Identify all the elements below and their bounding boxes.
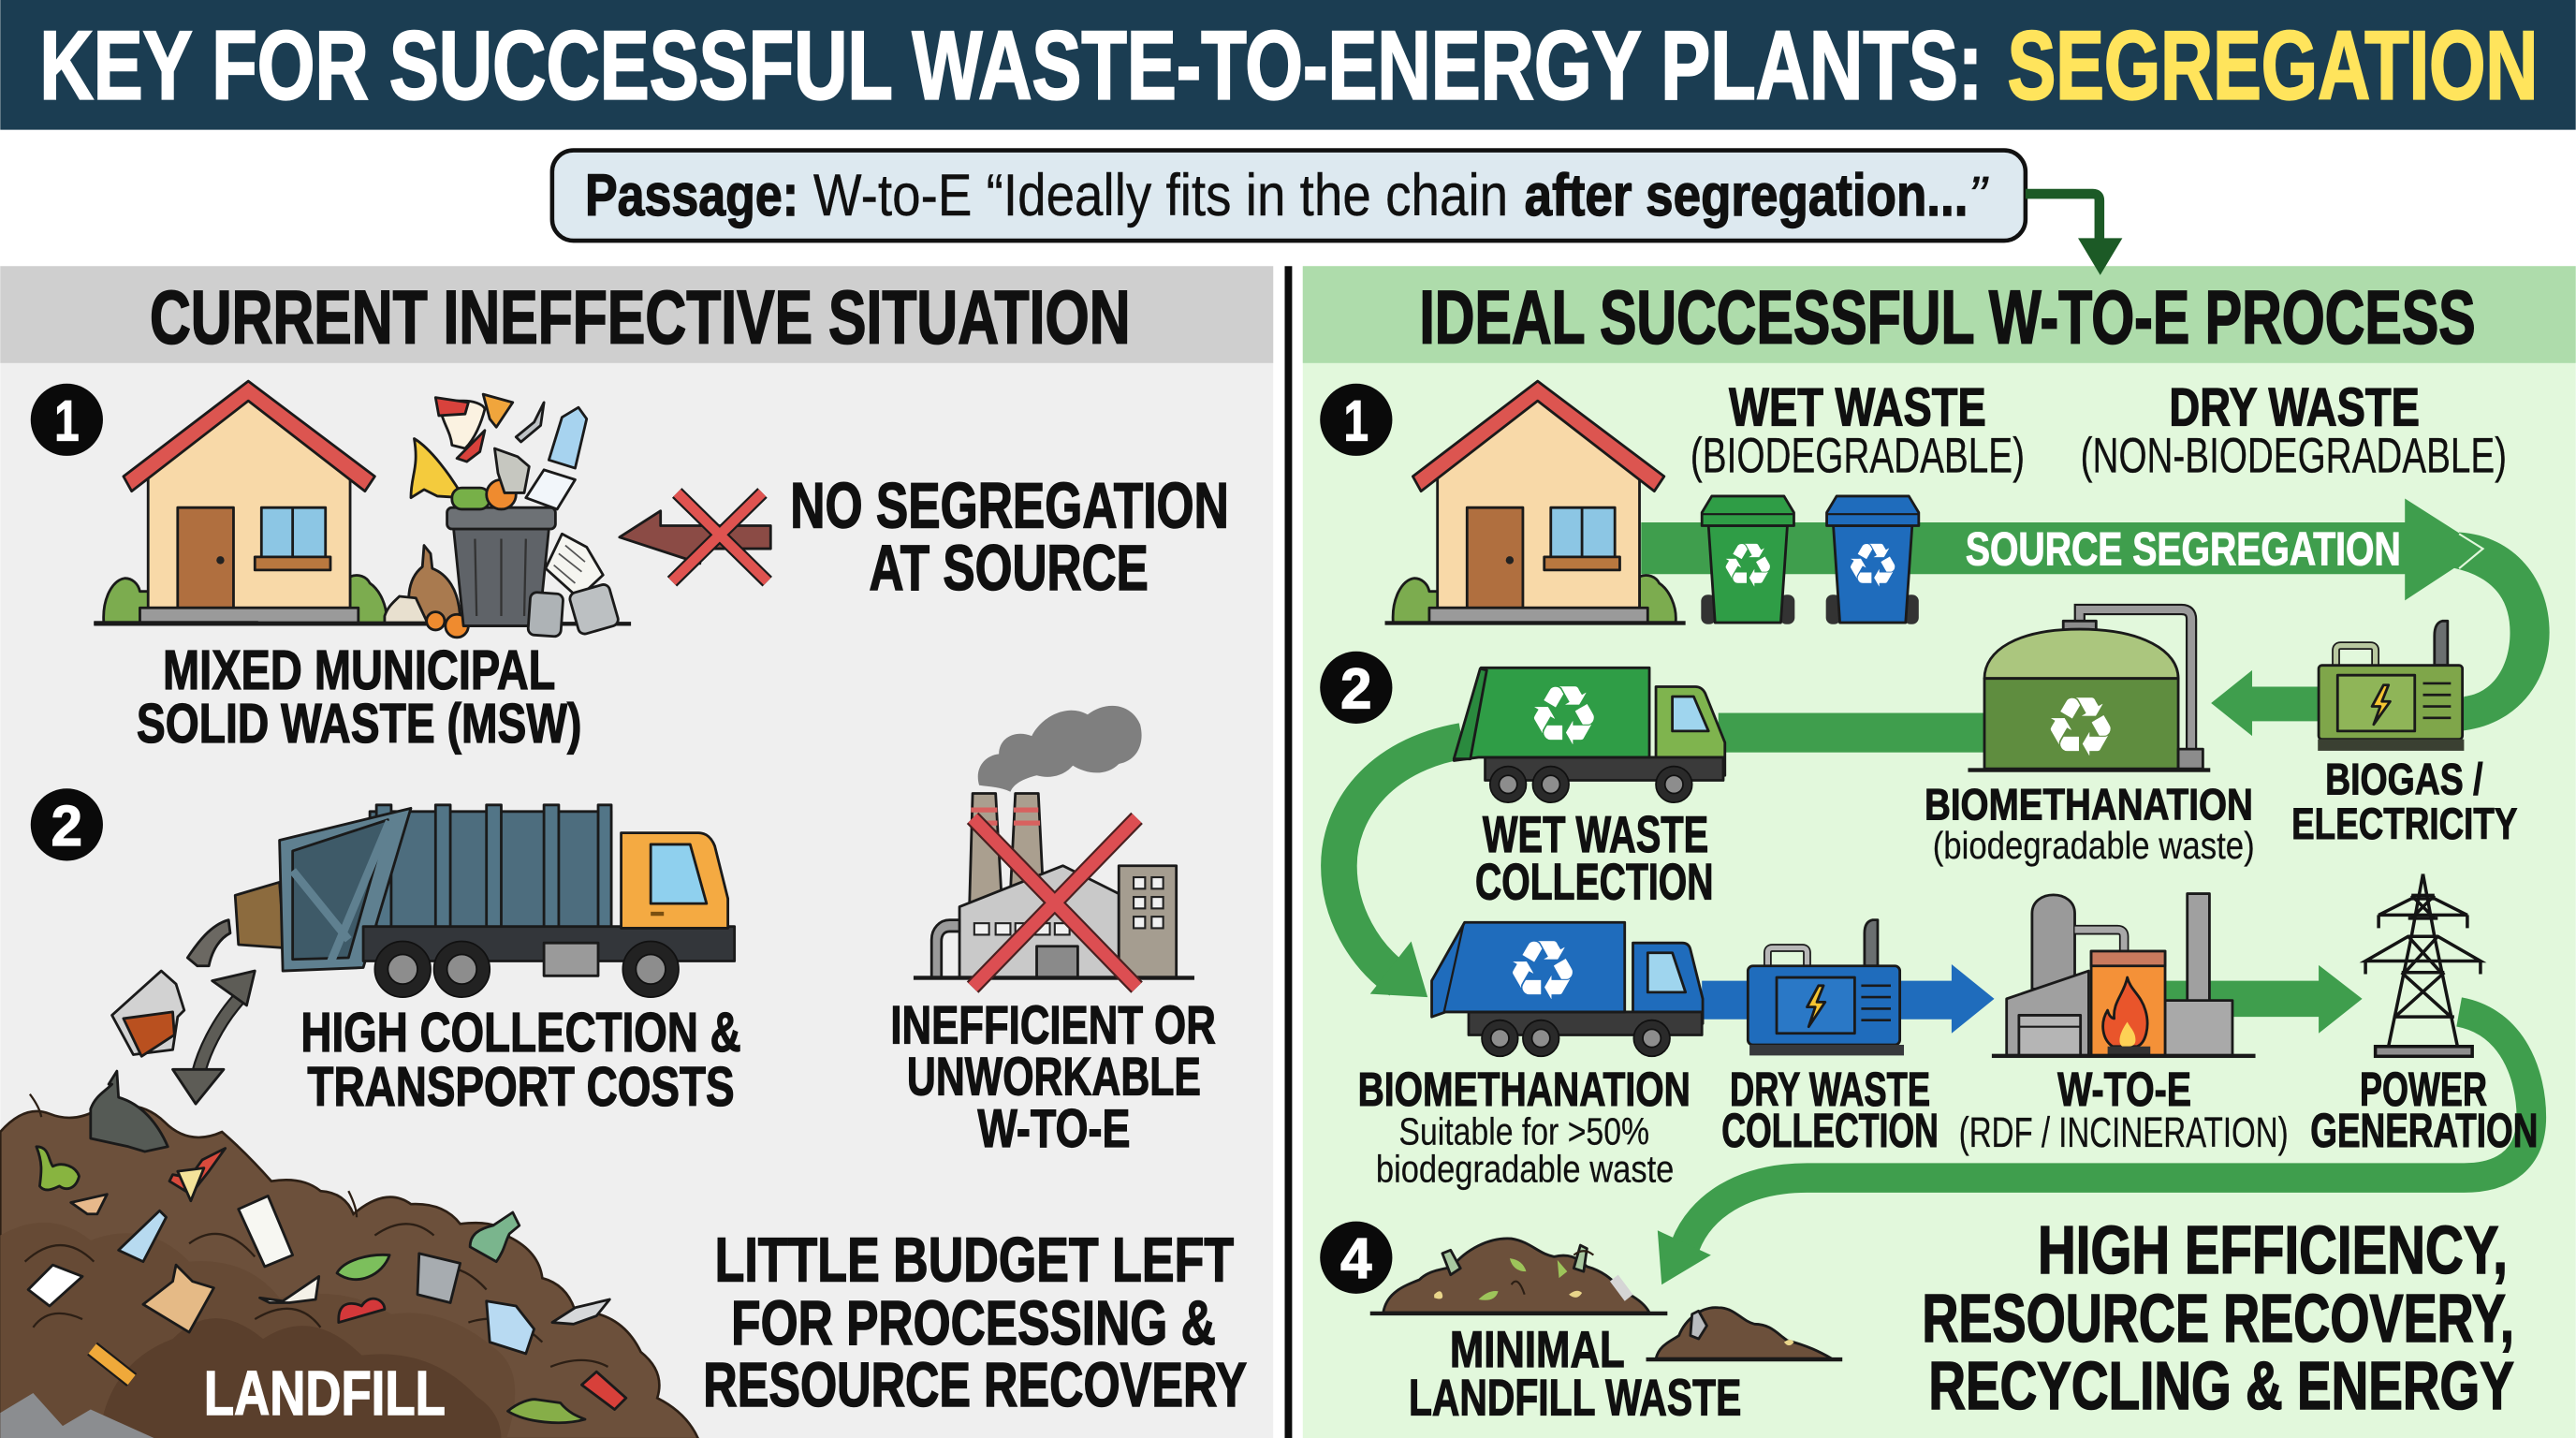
icon: dry waste truck <box>1432 922 1703 1056</box>
rear loader <box>280 808 411 971</box>
label: biogas electricity <box>2291 755 2517 849</box>
arrow: wet truck to blue truck <box>1339 741 1462 997</box>
label: wet waste: WET WASTE <box>1729 377 1986 437</box>
label: biomethanation biodegradable: (biodegradable waste) <box>1933 824 2255 867</box>
arrow: source segregation <box>1641 499 2550 731</box>
arrow: power generation to landfill <box>1658 1012 2531 1284</box>
label: dry waste collection <box>1721 1063 1939 1157</box>
passage callout: ” <box>1968 165 1989 227</box>
waste items in landfill <box>28 1071 626 1423</box>
label: high collection costs: TRANSPORT COSTS <box>307 1055 735 1118</box>
panel: current ineffective situation <box>0 266 1273 1438</box>
label: no segregation at source <box>790 469 1229 604</box>
panel: ideal process <box>1303 266 2576 1438</box>
label: landfill: LANDFILL <box>204 1359 446 1429</box>
label: source segregation: SOURCE SEGREGATION <box>1966 523 2401 576</box>
heading: current situation: CURRENT INEFFECTIVE SITUATION <box>150 276 1131 360</box>
icon: power pylon <box>2365 874 2481 1056</box>
label: power generation: POWER <box>2360 1063 2487 1116</box>
stacks <box>970 794 1044 908</box>
icon: dry waste truck: ♻ <box>1506 923 1579 1019</box>
icon: blue bin: ♻ <box>1846 531 1900 601</box>
icon: green bin <box>1701 496 1794 624</box>
label: inefficient W-to-E: UNWORKABLE <box>907 1048 1201 1108</box>
icon: biogas generator <box>2318 621 2464 751</box>
label: power generation <box>2310 1063 2538 1157</box>
passage callout: Passage: <box>585 163 798 228</box>
label: biomethanation suitable: biodegradable waste <box>1376 1148 1674 1191</box>
icon: dry waste generator <box>1748 920 1904 1055</box>
icon: minimal landfill large <box>1370 1239 1667 1313</box>
label: biomethanation suitable <box>1358 1063 1690 1191</box>
icon: crossed out factory <box>914 706 1194 988</box>
icon: wet waste truck: ♻ <box>1527 668 1601 764</box>
cans <box>528 583 620 637</box>
icon: collection truck <box>235 805 735 997</box>
container <box>370 805 611 928</box>
badge 4 <box>1320 1222 1392 1294</box>
arrow with X: no segregation <box>620 492 770 581</box>
header banner <box>0 0 2576 130</box>
label: mixed municipal solid waste: SOLID WASTE (MSW) <box>137 692 581 755</box>
label: no segregation at source: AT SOURCE <box>870 532 1149 604</box>
badge 2 right: 2 <box>1340 656 1371 721</box>
label: wet waste collection <box>1475 806 1713 910</box>
label: dry waste: DRY WASTE <box>2169 377 2420 437</box>
label: wet waste: (BIODEGRADABLE) <box>1690 428 2025 483</box>
label: minimal landfill waste: MINIMAL <box>1450 1321 1625 1378</box>
smoke <box>978 706 1142 792</box>
flying waste <box>411 394 587 509</box>
icon: house right <box>1385 381 1686 625</box>
badge 1 right <box>1320 384 1392 456</box>
label: biomethanation suitable: Suitable for >50% <box>1398 1109 1649 1152</box>
wheels <box>374 941 679 997</box>
icon: wet waste truck <box>1454 668 1725 802</box>
icon: blue bin <box>1826 496 1919 624</box>
label: wet waste collection: WET WASTE <box>1483 806 1708 863</box>
label: inefficient W-to-E: INEFFICIENT OR <box>890 995 1216 1055</box>
title text: KEY FOR SUCCESSFUL WASTE-TO-ENERGY PLANTS: <box>39 10 1983 119</box>
trash can <box>447 507 555 626</box>
label: high collection costs <box>300 1001 741 1118</box>
icon: waste-to-energy plant <box>1992 894 2256 1058</box>
label: W-to-E RDF <box>1959 1063 2289 1156</box>
label: dry waste <box>2081 377 2507 483</box>
passage callout: W-to-E “Ideally fits in the chain <box>813 163 1508 228</box>
badge 2 left <box>31 788 103 860</box>
label: W-to-E RDF: (RDF / INCINERATION) <box>1959 1108 2289 1156</box>
badge 2 left: 2 <box>51 794 82 858</box>
arrow: plant to pylon <box>2165 965 2363 1034</box>
badge 4: 4 <box>1340 1226 1371 1291</box>
icon: mixed waste bin <box>94 394 631 638</box>
badge 2 right <box>1320 652 1392 724</box>
label: little budget left <box>703 1226 1247 1420</box>
debris and double arrow <box>112 920 255 1104</box>
label: wet waste <box>1690 377 2025 483</box>
label: wet waste collection: COLLECTION <box>1475 853 1713 910</box>
badge 1 left: 1 <box>54 389 80 453</box>
label: biomethanation biodegradable <box>1925 781 2255 867</box>
icon: biogas tank <box>1968 609 2210 775</box>
label: little budget left: LITTLE BUDGET LEFT <box>715 1226 1234 1296</box>
arrow: passage to ideal process <box>2026 194 2122 275</box>
icon: green bin: ♻ <box>1720 531 1775 601</box>
label: biogas electricity: BIOGAS / <box>2325 755 2483 804</box>
icon: minimal landfill small <box>1647 1308 1842 1359</box>
spilled bag <box>235 882 285 947</box>
building <box>959 866 1119 977</box>
label: mixed municipal solid waste: MIXED MUNICIPAL <box>163 638 555 701</box>
label: minimal landfill waste <box>1409 1321 1741 1426</box>
label: high collection costs: HIGH COLLECTION & <box>300 1001 741 1064</box>
pile beside bin <box>385 534 603 638</box>
icon: biogas tank: ♻ <box>2043 680 2117 775</box>
cab <box>622 833 728 928</box>
badge 1 left <box>31 384 103 456</box>
label: minimal landfill waste: LANDFILL WASTE <box>1409 1369 1741 1426</box>
label: dry waste collection: DRY WASTE <box>1730 1063 1930 1116</box>
red X <box>973 818 1137 988</box>
label: dry waste collection: COLLECTION <box>1721 1104 1939 1157</box>
label: little budget left: RESOURCE RECOVERY <box>703 1351 1247 1420</box>
arrows between truck, tank and generator <box>1719 670 2324 753</box>
badge 1 right: 1 <box>1344 389 1368 453</box>
label: W-to-E RDF: W-TO-E <box>2057 1063 2191 1116</box>
passage callout <box>552 151 2026 241</box>
flame <box>2103 977 2147 1047</box>
label: biogas electricity: ELECTRICITY <box>2291 800 2517 849</box>
illustration: landfill mound <box>0 1071 698 1438</box>
label: no segregation at source: NO SEGREGATION <box>790 469 1229 541</box>
passage callout: after segregation... <box>1525 163 1968 228</box>
label: inefficient W-to-E: W-TO-E <box>977 1099 1131 1159</box>
label: mixed municipal solid waste <box>137 638 581 755</box>
chassis <box>363 927 735 961</box>
arrow: blue flow <box>1702 964 1995 1034</box>
label: little budget left: FOR PROCESSING & <box>731 1289 1216 1358</box>
label: high efficiency outcome <box>1922 1213 2514 1424</box>
label: biomethanation biodegradable: BIOMETHANATION <box>1925 781 2253 830</box>
icon: house left <box>94 381 387 625</box>
label: inefficient W-to-E <box>890 995 1216 1159</box>
label: biomethanation suitable: BIOMETHANATION <box>1358 1063 1690 1116</box>
